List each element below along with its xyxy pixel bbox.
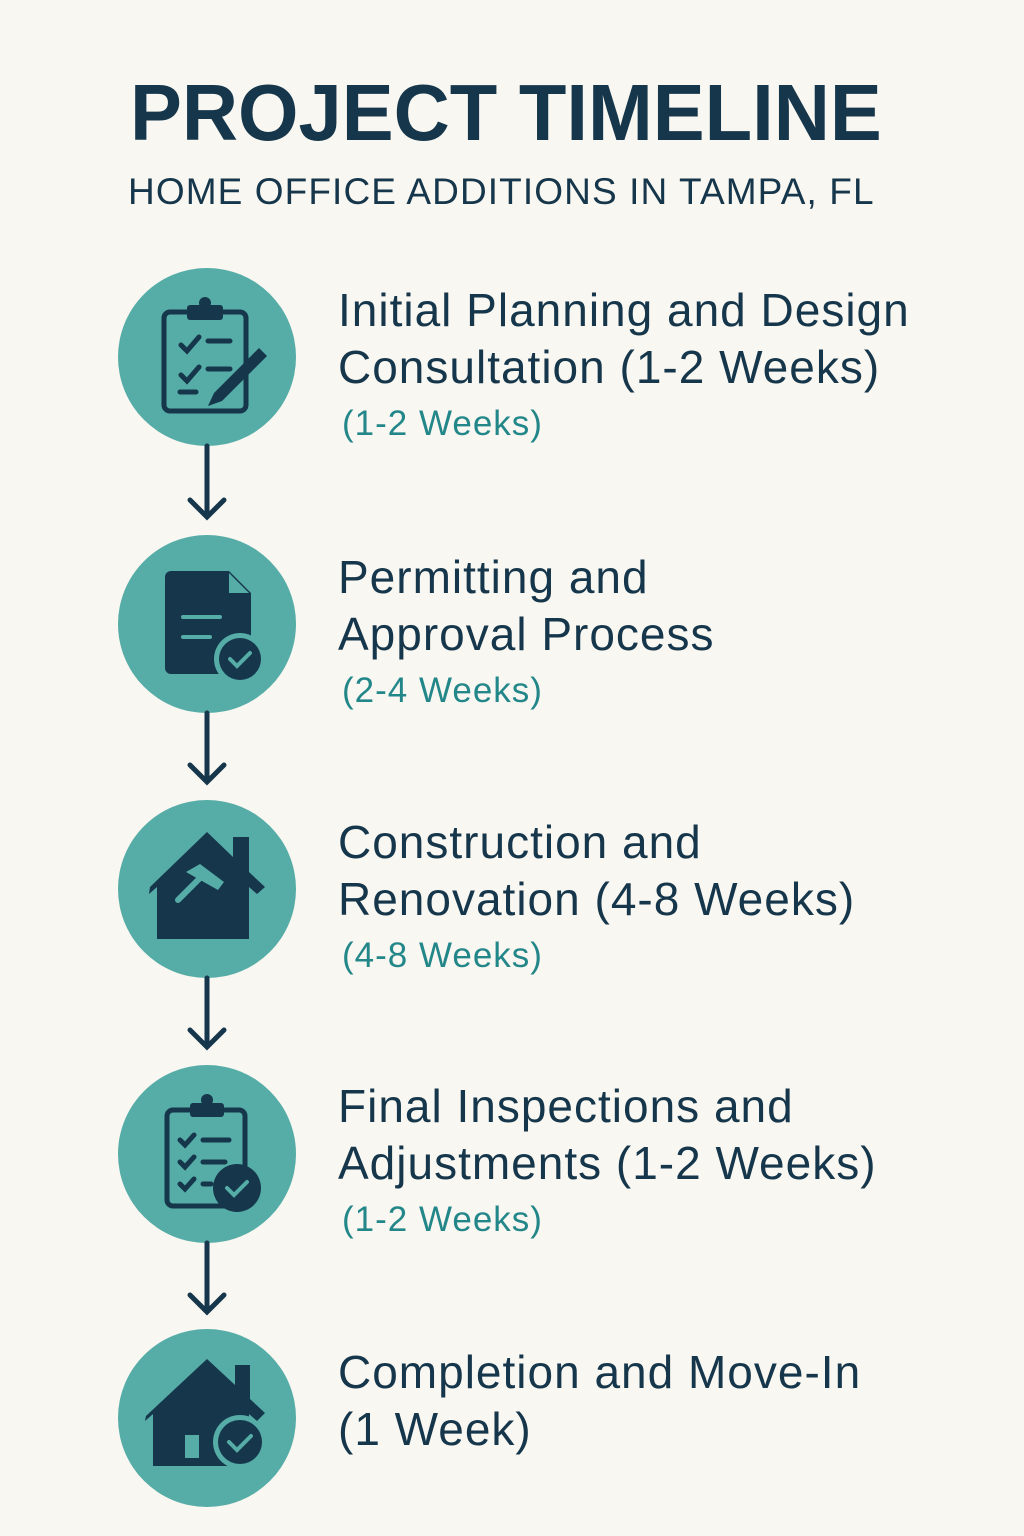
step 5 text <box>338 1346 861 1455</box>
arrow 4 <box>190 1243 224 1312</box>
step 1 text: Initial Planning and Design <box>338 284 910 336</box>
step 3 text: Renovation (4-8 Weeks) <box>338 873 855 925</box>
step 4 text <box>338 1080 877 1239</box>
step 1 text: (1-2 Weeks) <box>342 404 543 443</box>
step 4 text: Final Inspections and <box>338 1080 794 1132</box>
step 3 text <box>338 816 855 975</box>
subtitle: HOME OFFICE ADDITIONS IN TAMPA, FL <box>128 171 875 212</box>
arrow 3 <box>190 978 224 1047</box>
step 3 text: (4-8 Weeks) <box>342 936 543 975</box>
step 3 text: Construction and <box>338 816 702 868</box>
step 4 text: (1-2 Weeks) <box>342 1200 543 1239</box>
icon: house with check <box>118 1329 296 1507</box>
title: PROJECT TIMELINE <box>130 68 882 157</box>
step 2 text: (2-4 Weeks) <box>342 671 543 710</box>
step 4 text: Adjustments (1-2 Weeks) <box>338 1137 877 1189</box>
step 5 text: Completion and Move-In <box>338 1346 861 1398</box>
step 1 text: Consultation (1-2 Weeks) <box>338 341 880 393</box>
step 2 text <box>338 551 714 710</box>
arrow 1 <box>190 446 224 517</box>
icon: clipboard with pencil <box>118 268 296 446</box>
arrow 2 <box>190 713 224 782</box>
icon: checklist with check <box>118 1065 296 1243</box>
step 5 text: (1 Week) <box>338 1403 532 1455</box>
icon: document with check <box>118 535 296 713</box>
step 2 text: Permitting and <box>338 551 649 603</box>
icon: house with hammer <box>118 800 296 978</box>
step 1 text <box>338 284 910 443</box>
step 2 text: Approval Process <box>338 608 714 660</box>
